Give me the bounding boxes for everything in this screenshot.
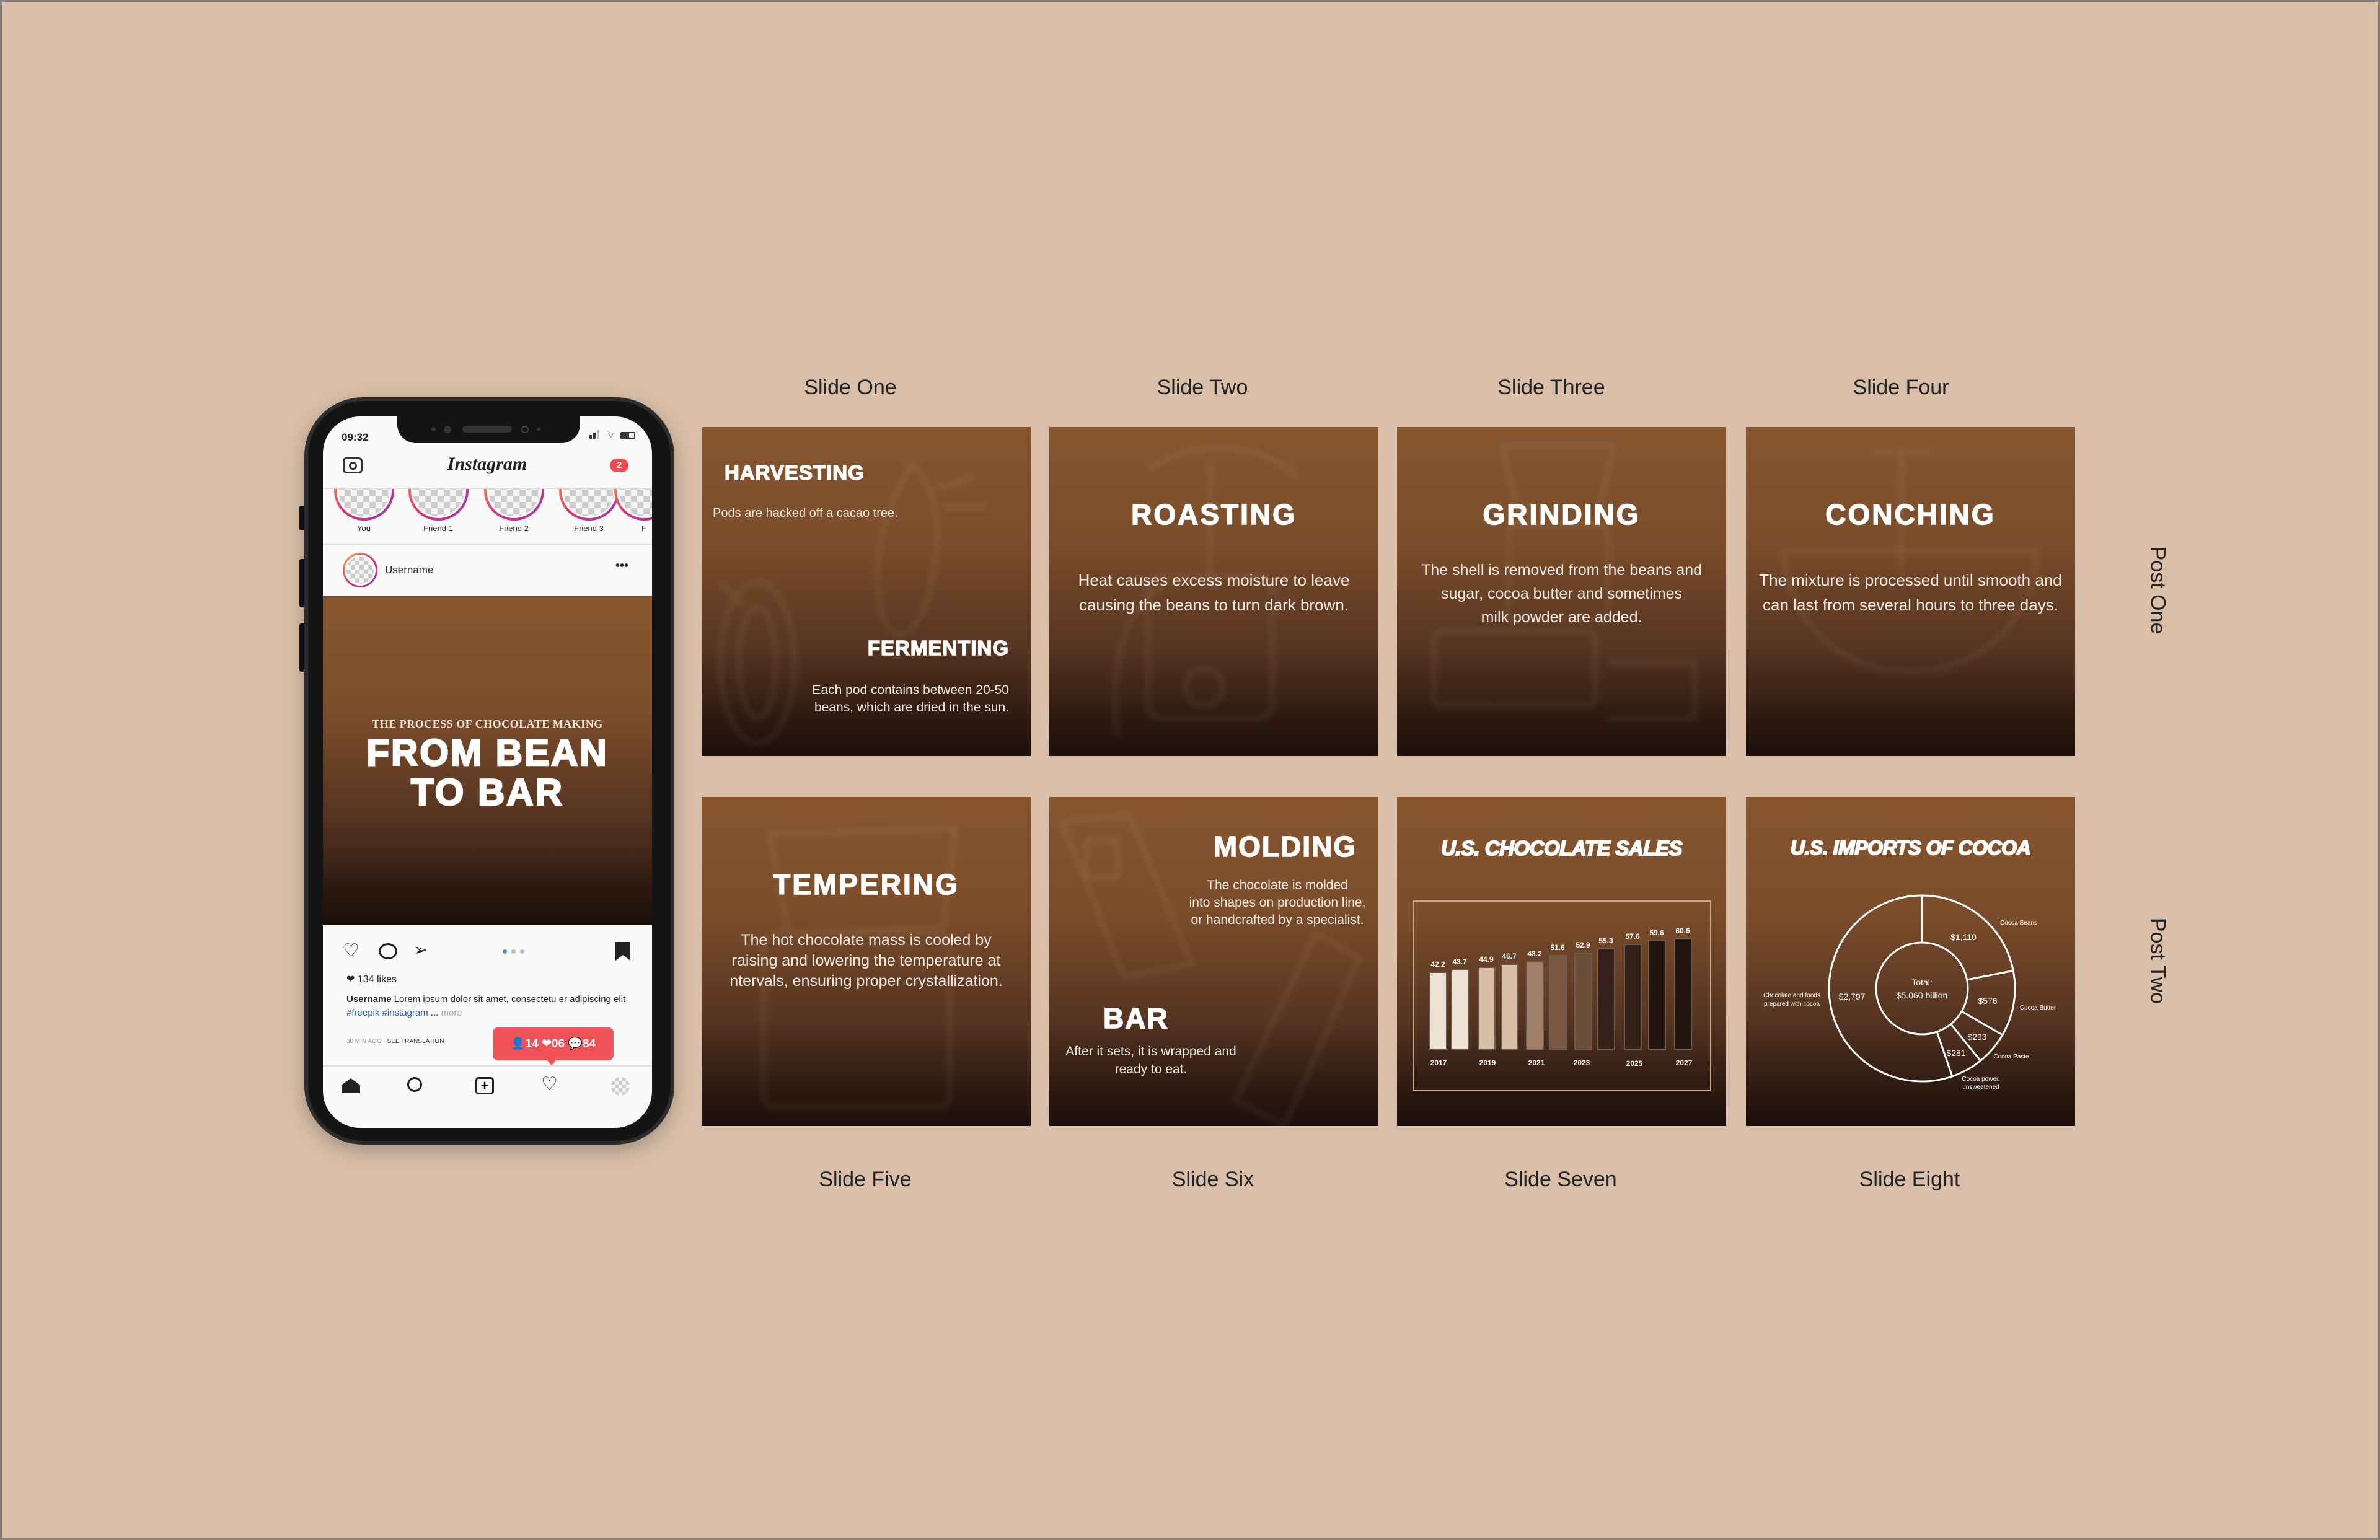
- bar chart: 2019: [1479, 1058, 1496, 1067]
- donut chart: Cocoa power,: [1962, 1076, 2000, 1083]
- text: bar: [1065, 1044, 1236, 1076]
- stories row: [334, 489, 652, 533]
- stories row: Friend 1: [423, 524, 453, 533]
- bar chart: 2027: [1676, 1058, 1693, 1067]
- bar chart: 2025: [1626, 1059, 1643, 1068]
- header: instagram logo: Instagram: [447, 454, 527, 474]
- label: slide four: Slide Four: [1853, 376, 1949, 399]
- label: post two: Post Two: [2146, 918, 2169, 1004]
- action row icons: ➢: [413, 940, 428, 959]
- donut chart: $293: [1967, 1032, 1987, 1042]
- label: slide two: Slide Two: [1157, 376, 1248, 399]
- text: roasting: causing the beans to turn dark brown.: [1079, 596, 1349, 614]
- heading: conching: CONCHING: [1825, 498, 1996, 530]
- text: tempering: The hot chocolate mass is cooled by: [741, 931, 992, 949]
- bar chart: 59.6: [1649, 928, 1664, 937]
- text: molding: into shapes on production line,: [1189, 895, 1365, 910]
- status icons: ⌔: [607, 430, 615, 440]
- text: grinding: milk powder are added.: [1481, 609, 1642, 626]
- donut chart: $1,110: [1950, 932, 1977, 942]
- text: bar: ready to eat.: [1115, 1062, 1187, 1076]
- donut chart: Cocoa Beans: [2000, 920, 2037, 926]
- phone body: [304, 397, 674, 1145]
- bottom nav icons: ♡: [541, 1074, 558, 1094]
- heading: chocolate sales: U.S. CHOCOLATE SALES: [1441, 837, 1682, 860]
- donut chart: prepared with cocoa: [1764, 1001, 1820, 1008]
- text: tempering: [729, 931, 1003, 990]
- bar chart: 55.3: [1598, 936, 1613, 945]
- cover subtitle: THE PROCESS OF CHOCOLATE MAKING: [372, 718, 603, 730]
- bar chart: 46.7: [1502, 952, 1517, 961]
- label: slide three: Slide Three: [1497, 376, 1605, 399]
- action row icons: ♡: [343, 941, 359, 961]
- donut chart: $576: [1978, 996, 1998, 1006]
- cover title: TO BAR: [411, 772, 564, 813]
- donut chart: $281: [1946, 1048, 1966, 1058]
- text: conching: The mixture is processed until smooth and: [1759, 571, 2062, 589]
- text: tempering: ntervals, ensuring proper crystallization.: [729, 972, 1003, 990]
- screen: [323, 416, 652, 1128]
- text: grinding: The shell is removed from the beans and: [1421, 561, 1702, 579]
- post header: avatar and username: Username: [385, 564, 433, 576]
- post header: avatar and username: [343, 553, 628, 587]
- text: fermenting: Each pod contains between 20-50: [812, 683, 1009, 697]
- bar chart: 2023: [1574, 1058, 1590, 1067]
- notification bubble: [493, 1027, 614, 1060]
- stories row: F: [641, 524, 646, 533]
- heading: bar: BAR: [1103, 1002, 1169, 1034]
- text: grinding: [1421, 561, 1702, 626]
- header: camera icon: [343, 457, 363, 473]
- label: slide five: Slide Five: [819, 1168, 912, 1191]
- slide three: grinding: [1397, 427, 1726, 756]
- text: roasting: Heat causes excess moisture to leave: [1078, 571, 1349, 589]
- slide two: roasting: [1049, 427, 1378, 756]
- bar chart: [1413, 900, 1711, 1091]
- side buttons: [299, 506, 307, 530]
- label: slide seven: Slide Seven: [1504, 1168, 1617, 1191]
- bar chart: 52.9: [1576, 941, 1590, 949]
- heading: tempering: TEMPERING: [773, 868, 959, 900]
- timestamp: 30 MIN AGO · SEE TRANSLATION: [346, 1038, 444, 1045]
- header: notification badge: [610, 459, 628, 472]
- bar chart: 43.7: [1452, 957, 1467, 966]
- text: molding: [1189, 878, 1365, 927]
- stories row: You: [357, 524, 371, 533]
- donut chart: $2,797: [1839, 992, 1866, 1001]
- bar chart: 2017: [1430, 1058, 1447, 1067]
- label: slide six: Slide Six: [1172, 1168, 1254, 1191]
- header: notification badge: 2: [617, 460, 622, 470]
- bar chart: 2021: [1528, 1058, 1545, 1067]
- heading: roasting: ROASTING: [1131, 498, 1297, 530]
- post header: avatar and username: •••: [615, 559, 628, 573]
- text: bar: After it sets, it is wrapped and: [1065, 1044, 1236, 1058]
- donut chart: Total:: [1911, 977, 1933, 987]
- heading: imports of cocoa: U.S. IMPORTS OF COCOA: [1791, 837, 2030, 859]
- stories row: Friend 3: [574, 524, 604, 533]
- cover title: [366, 732, 609, 813]
- donut chart: [1763, 895, 2056, 1091]
- cover title: FROM BEAN: [366, 732, 609, 773]
- slide five: tempering: [702, 797, 1031, 1126]
- heading: harvesting: HARVESTING: [725, 461, 865, 484]
- bar chart: 57.6: [1625, 932, 1640, 941]
- heading: fermenting: FERMENTING: [868, 636, 1009, 659]
- label: post one: Post One: [2146, 547, 2169, 634]
- text: molding: The chocolate is molded: [1207, 878, 1348, 892]
- text: grinding: sugar, cocoa butter and sometimes: [1441, 585, 1682, 602]
- label: slide one: Slide One: [804, 376, 897, 399]
- donut chart: unsweetened: [1962, 1084, 1999, 1091]
- donut chart: Cocoa Butter: [2020, 1005, 2056, 1011]
- slide six: molding / bar: [1049, 797, 1378, 1126]
- label: slide eight: Slide Eight: [1859, 1168, 1960, 1191]
- status icons: [589, 430, 635, 440]
- action row icons: [343, 940, 630, 961]
- slide eight: us imports of cocoa donut chart: [1746, 797, 2075, 1126]
- bar chart: 60.6: [1675, 926, 1690, 935]
- slide one: harvesting / fermenting: [702, 427, 1031, 756]
- bar chart: 48.2: [1527, 949, 1542, 958]
- status time: 09:32: [342, 431, 368, 443]
- bottom nav icons: [342, 1074, 630, 1096]
- text: tempering: raising and lowering the temperature at: [732, 952, 1000, 969]
- text: fermenting: [812, 683, 1009, 715]
- text: conching: [1759, 571, 2062, 614]
- text: roasting: [1078, 571, 1349, 614]
- likes: ❤ 134 likes: [346, 974, 397, 985]
- text: molding: or handcrafted by a specialist.: [1191, 913, 1364, 927]
- bar chart: 44.9: [1479, 955, 1494, 964]
- donut chart: Chocolate and foods: [1763, 992, 1820, 999]
- post image: cover slide: [323, 596, 652, 925]
- text: harvesting: Pods are hacked off a cacao tree.: [713, 506, 898, 520]
- bottom nav icons: +: [481, 1078, 488, 1093]
- phone mockup: [295, 394, 684, 1160]
- slide four: conching: [1746, 427, 2075, 756]
- heading: grinding: GRINDING: [1483, 498, 1640, 530]
- notification bubble: 👤14 ❤06 💬84: [511, 1037, 596, 1050]
- text: conching: can last from several hours to three days.: [1763, 596, 2058, 614]
- donut chart: Cocoa Paste: [1993, 1054, 2029, 1060]
- stories row: Friend 2: [499, 524, 529, 533]
- text: fermenting: beans, which are dried in the sun.: [814, 700, 1009, 715]
- donut chart: $5.060 billion: [1897, 990, 1947, 1000]
- caption: Username Lorem ipsum dolor sit amet, consectetu er adipiscing elit #freepik #instagram ... more: [346, 994, 625, 1018]
- bar chart: 42.2: [1430, 960, 1445, 969]
- slide seven: us chocolate sales bar chart: [1397, 797, 1726, 1126]
- bar chart: 51.6: [1550, 943, 1565, 952]
- notch: [397, 416, 580, 443]
- heading: molding: MOLDING: [1214, 830, 1357, 863]
